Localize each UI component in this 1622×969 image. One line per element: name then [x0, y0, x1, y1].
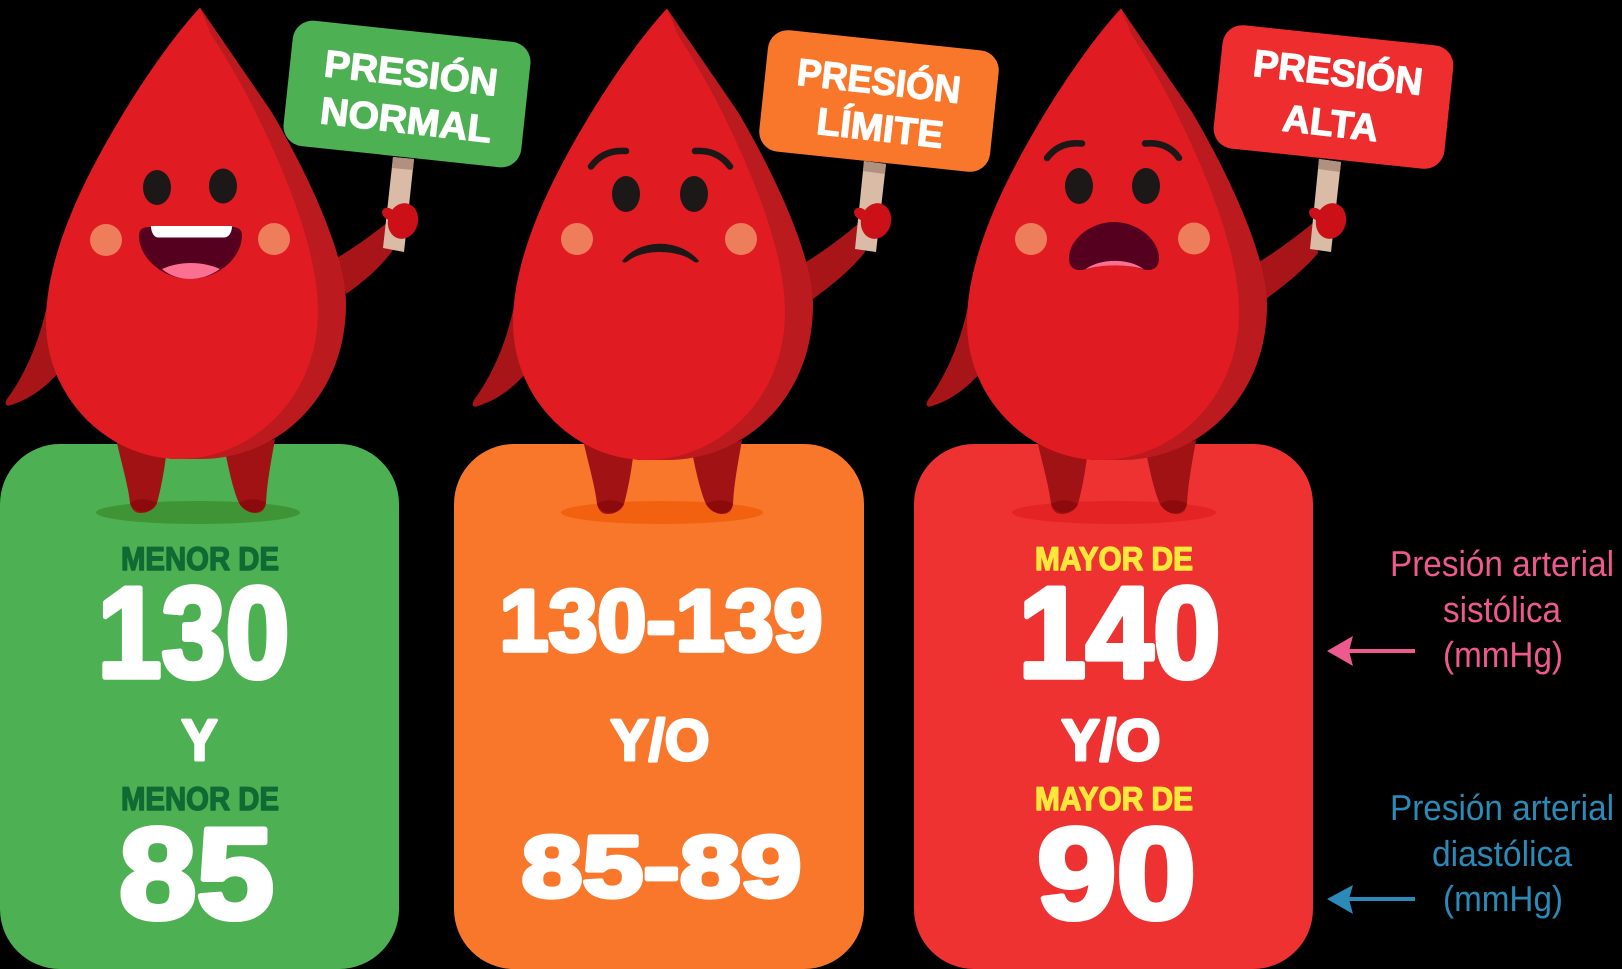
- column: presión alta: [914, 8, 1455, 969]
- values: normal: [98, 540, 290, 946]
- values: normal: MENOR DE: [121, 540, 279, 577]
- sign: presión normal: PRESIÓN: [322, 42, 500, 105]
- values: alta: 140: [1018, 561, 1220, 705]
- values: límite: Y/O: [610, 708, 710, 773]
- column: presión normal: [0, 8, 533, 969]
- label: presión arterial sistólica: [1390, 543, 1614, 675]
- sign: presión alta: [1212, 23, 1455, 252]
- arrow: diastólica: [1327, 885, 1415, 914]
- panel: normal: [0, 444, 399, 969]
- label: presión arterial sistólica: sistólica: [1443, 589, 1562, 630]
- label: presión arterial diastólica: [1390, 787, 1614, 919]
- sign: presión normal: NORMAL: [318, 90, 494, 152]
- sign: presión alta: PRESIÓN: [1251, 42, 1425, 104]
- label: presión arterial diastólica: (mmHg): [1443, 878, 1563, 919]
- values: alta: MAYOR DE: [1035, 540, 1193, 577]
- character: worried blood drop: [473, 8, 865, 524]
- sign: presión límite: PRESIÓN: [795, 51, 963, 112]
- values: alta: [1018, 540, 1220, 946]
- values: límite: [500, 572, 822, 916]
- values: alta: Y/O: [1062, 708, 1160, 773]
- values: alta: 90: [1037, 802, 1196, 946]
- panel: límite: [454, 444, 864, 969]
- sign: presión límite: LÍMITE: [814, 100, 945, 157]
- sign: presión alta: ALTA: [1280, 98, 1380, 150]
- values: normal: 130: [98, 561, 290, 705]
- label: presión arterial sistólica: (mmHg): [1443, 634, 1563, 675]
- column: presión límite: [454, 8, 1001, 969]
- sign: presión límite: [757, 28, 1001, 252]
- values: límite: 85-89: [522, 818, 802, 916]
- values: normal: 85: [119, 802, 274, 946]
- values: normal: Y: [182, 708, 218, 773]
- values: límite: 130-139: [500, 572, 822, 670]
- values: alta: MAYOR DE: [1035, 780, 1193, 817]
- panel: alta: [914, 444, 1313, 969]
- character: distressed blood drop: [927, 8, 1318, 524]
- values: normal: MENOR DE: [121, 780, 279, 817]
- sign: presión normal: [281, 19, 533, 252]
- label: presión arterial diastólica: diastólica: [1432, 833, 1573, 874]
- character: happy blood drop: [6, 8, 393, 524]
- arrow: sistólica: [1327, 636, 1415, 666]
